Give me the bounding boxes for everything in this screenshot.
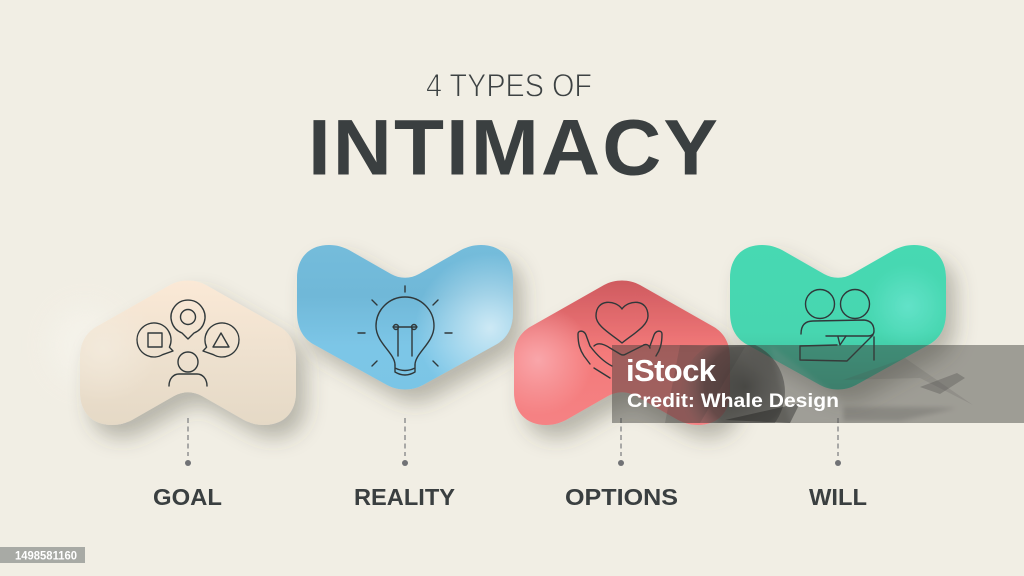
icon: two people hugging	[800, 290, 874, 361]
icon: speech bubbles and person	[137, 300, 239, 386]
title block	[308, 68, 720, 192]
shape: goal chevron	[80, 280, 296, 425]
panel: reality	[297, 245, 513, 390]
connector: options	[618, 418, 624, 466]
image id tag	[0, 547, 85, 563]
shape: will heart	[730, 245, 946, 390]
icon: heart in hands	[578, 302, 662, 378]
panel: will	[730, 245, 946, 390]
watermark logo: iStock	[626, 353, 717, 388]
shape: reality heart	[297, 245, 513, 390]
heading: intimacy: INTIMACY	[308, 102, 720, 192]
watermark backdrop shapes	[665, 345, 971, 423]
watermark credit: Credit: Whale Design	[627, 391, 839, 412]
image id tag: 1498581160	[15, 550, 77, 562]
label: will: WILL	[809, 484, 867, 510]
shape: options chevron	[514, 280, 730, 425]
icon: light bulb	[358, 286, 452, 375]
connector: reality	[402, 418, 408, 466]
subtitle: 4 types of: 4 TYPES OF	[426, 68, 592, 104]
watermark band fill	[612, 345, 1024, 423]
panel: options	[514, 280, 730, 425]
labels	[153, 484, 867, 510]
label: goal: GOAL	[153, 484, 222, 510]
connectors	[185, 418, 841, 466]
label: options: OPTIONS	[565, 484, 678, 510]
label: reality: REALITY	[354, 484, 455, 510]
connector: goal	[185, 418, 191, 466]
panel: goal	[80, 280, 296, 425]
watermark band	[612, 345, 1024, 423]
connector: will	[835, 418, 841, 466]
